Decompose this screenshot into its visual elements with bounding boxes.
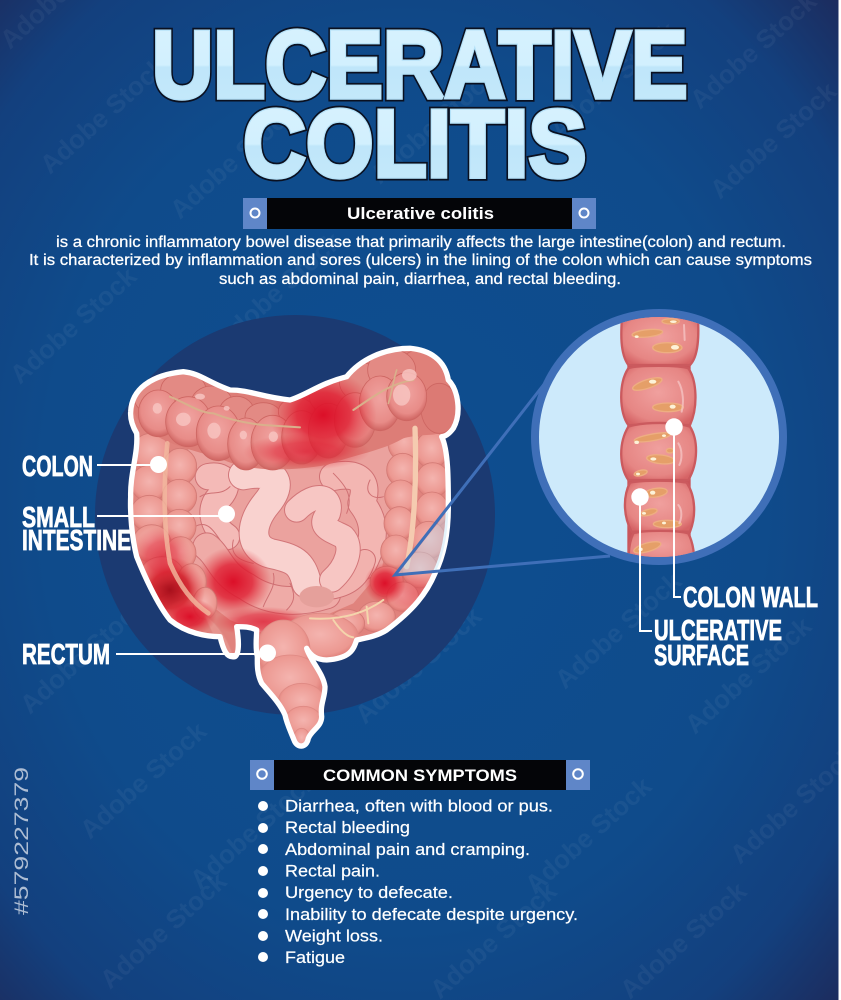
title (152, 12, 688, 198)
definition banner (243, 198, 596, 229)
red area small intestine (201, 548, 270, 614)
watermarks: Adobe Stock (14, 590, 153, 719)
symptoms list: Rectal pain. (285, 862, 380, 880)
watermarks: Adobe Stock (704, 75, 841, 204)
symptoms list: Fatigue (285, 948, 345, 967)
definition paragraph: is a chronic inflammatory bowel disease that primarily affects the large intestine(colon) and rectum. (56, 234, 786, 251)
highlights (153, 369, 417, 442)
watermarks: Adobe Stock (349, 600, 488, 729)
title line 2: COLITIS: COLITIS (243, 90, 586, 198)
label: small intestine (22, 502, 235, 557)
label: small intestine: SMALL (22, 502, 95, 534)
large intestine illustration (131, 347, 458, 748)
dark circle behind intestine (95, 315, 495, 715)
definition paragraph: such as abdominal pain, diarrhea, and rectal bleeding. (219, 271, 621, 288)
label: ulcerative surface: SURFACE (654, 640, 749, 672)
definition banner: Ulcerative colitis (347, 204, 494, 223)
zoom callout connector lines (395, 383, 610, 575)
label: colon wall (665, 418, 818, 614)
small intestine (188, 437, 395, 633)
watermarks: Adobe Stock (94, 865, 233, 994)
watermarks: Adobe Stock (34, 50, 173, 179)
descending colon (333, 434, 446, 634)
symptoms list: Abdominal pain and cramping. (285, 840, 530, 859)
watermarks: Adobe Stock (164, 95, 303, 224)
label: rectum (22, 639, 276, 671)
watermarks: Adobe Stock (549, 565, 688, 694)
watermarks: Adobe Stock (679, 610, 818, 739)
title line 1: ULCERATIVE: ULCERATIVE (152, 12, 688, 118)
transverse colon (133, 347, 458, 470)
watermarks: Adobe Stock (184, 765, 323, 894)
title line 1: ULCERATIVE: ULCERATIVE (152, 12, 688, 118)
watermarks: Adobe Stock (74, 715, 213, 844)
label: ulcerative surface: ULCERATIVE (654, 615, 782, 647)
symptoms list: Inability to defecate despite urgency. (285, 905, 578, 924)
lens wedge tint on colon (398, 510, 448, 574)
title line 2: COLITIS: COLITIS (243, 90, 586, 198)
watermarks: Adobe Stock (209, 225, 348, 354)
watermarks: Adobe Stock (4, 260, 143, 389)
white sticker outline (131, 348, 458, 746)
symptoms list: Rectal bleeding (285, 818, 410, 837)
definition paragraph (29, 234, 812, 288)
label: rectum: RECTUM (22, 639, 110, 671)
title line 1: ULCERATIVE: ULCERATIVE (152, 12, 688, 118)
stock number: #579227379 (12, 767, 33, 915)
label: ulcerative surface (631, 488, 782, 672)
colon section (621, 310, 698, 563)
label: small intestine: INTESTINE (22, 525, 131, 557)
symptoms banner: COMMON SYMPTOMS (323, 766, 517, 785)
symptoms list: Diarrhea, often with blood or pus. (285, 796, 553, 816)
watermarks: Adobe Stock (544, 15, 683, 144)
watermarks: Adobe Stock (364, 60, 503, 189)
symptoms list: Weight loss. (285, 926, 383, 946)
label: colon: COLON (22, 451, 93, 483)
symptoms banner (250, 760, 590, 790)
red inflamed areas (132, 370, 447, 635)
symptoms list (258, 796, 578, 967)
ascending colon (131, 433, 217, 628)
ulcers (631, 319, 683, 555)
sigmoid and rectum (203, 613, 358, 748)
body base (131, 348, 458, 746)
mesenteric strips (165, 370, 416, 637)
magnified lens (535, 310, 783, 563)
watermarks: Adobe Stock (519, 770, 658, 899)
symptoms list: Urgency to defecate. (285, 883, 453, 902)
title line 2: COLITIS: COLITIS (243, 90, 586, 198)
definition paragraph: It is characterized by inflammation and sores (ulcers) in the lining of the colon which can cause symptoms (29, 252, 812, 269)
